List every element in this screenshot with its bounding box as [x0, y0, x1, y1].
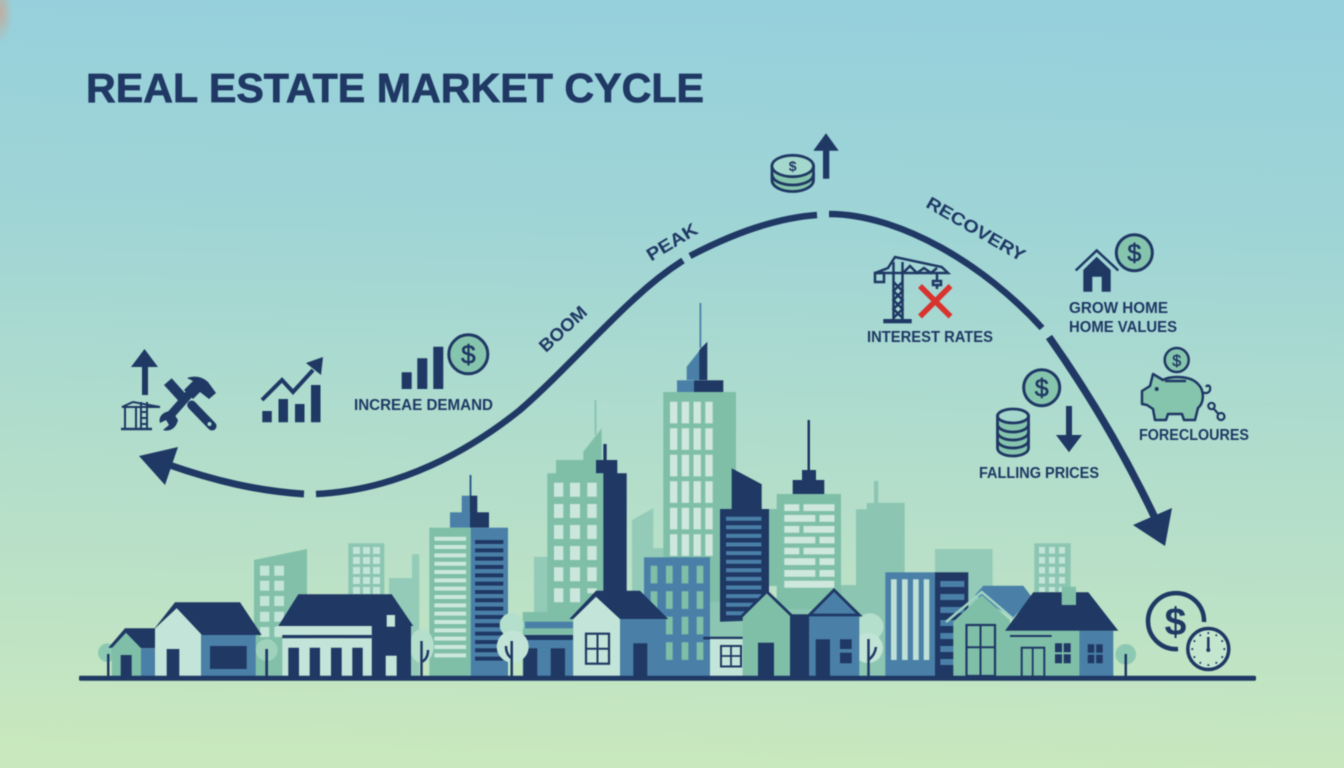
icon: bars and dollar coin: [402, 335, 488, 389]
icon: coin stack with up arrow: [772, 133, 839, 192]
arrow: curve end left: [139, 447, 178, 485]
icon: piggy bank: [1142, 348, 1224, 420]
label: grow home values: HOME VALUES: [1069, 319, 1177, 336]
icon: chain link: [1208, 403, 1224, 420]
skyline background buildings: [254, 481, 1071, 676]
striped blue building: [885, 572, 968, 676]
icon: construction and tools: [121, 349, 216, 431]
house 4: [569, 591, 668, 676]
label: falling prices: FALLING PRICES: [979, 465, 1099, 482]
stage label: peak: PEAK: [643, 219, 701, 265]
label: interest rates: INTEREST RATES: [867, 329, 993, 346]
icon: hammer and wrench: [160, 377, 216, 431]
trees: [98, 613, 1136, 676]
title: REAL ESTATE MARKET CYCLE: [86, 65, 704, 111]
label: grow home values: [1069, 300, 1177, 336]
icon: dollar and clock: [1148, 593, 1229, 670]
tall central tower: [663, 303, 736, 602]
house 3: [276, 594, 413, 676]
icon: coins, dollar and down arrow: $: [1035, 374, 1049, 402]
tower with brick windows: [769, 420, 841, 609]
tower with square windows and navy spire: [547, 400, 627, 618]
house 1: [108, 628, 155, 676]
label: grow home values: GROW HOME: [1069, 300, 1168, 317]
navy striped tower: [720, 468, 769, 622]
small pale house: [703, 637, 743, 676]
ground line: [79, 676, 1256, 681]
icon: house with dollar coin: [1076, 235, 1152, 292]
house 2: [153, 602, 262, 676]
icon: small crane: [121, 402, 160, 429]
icon: piggy bank: $: [1172, 353, 1181, 370]
label: foreclosures: FORECLOURES: [1139, 427, 1249, 444]
icon: house with dollar coin: $: [1127, 240, 1141, 268]
label: increase demand: INCREAE DEMAND: [354, 397, 493, 414]
house 8: [1005, 587, 1118, 677]
stage label: recovery: RECOVERY: [923, 193, 1029, 266]
house 7: [946, 586, 1032, 676]
house 5: [740, 592, 809, 676]
stage label: boom: BOOM: [535, 302, 591, 356]
tower with striped windows: [429, 475, 508, 676]
house 6: [809, 590, 859, 676]
icon: dollar and clock: $: [1165, 601, 1187, 644]
market cycle curve: [168, 214, 1155, 518]
icon: bars and dollar coin: $: [461, 340, 476, 370]
blue block with green windows: [644, 557, 710, 676]
icon: rising chart: [262, 357, 323, 422]
arrow: curve end right: [1133, 508, 1172, 546]
icon: coin stack with up arrow: $: [789, 158, 797, 174]
icon: coins, dollar and down arrow: [998, 370, 1082, 456]
low shop building: [523, 612, 574, 676]
icon: tower crane with red cross: [875, 257, 950, 323]
icon: up arrow: [131, 349, 158, 395]
